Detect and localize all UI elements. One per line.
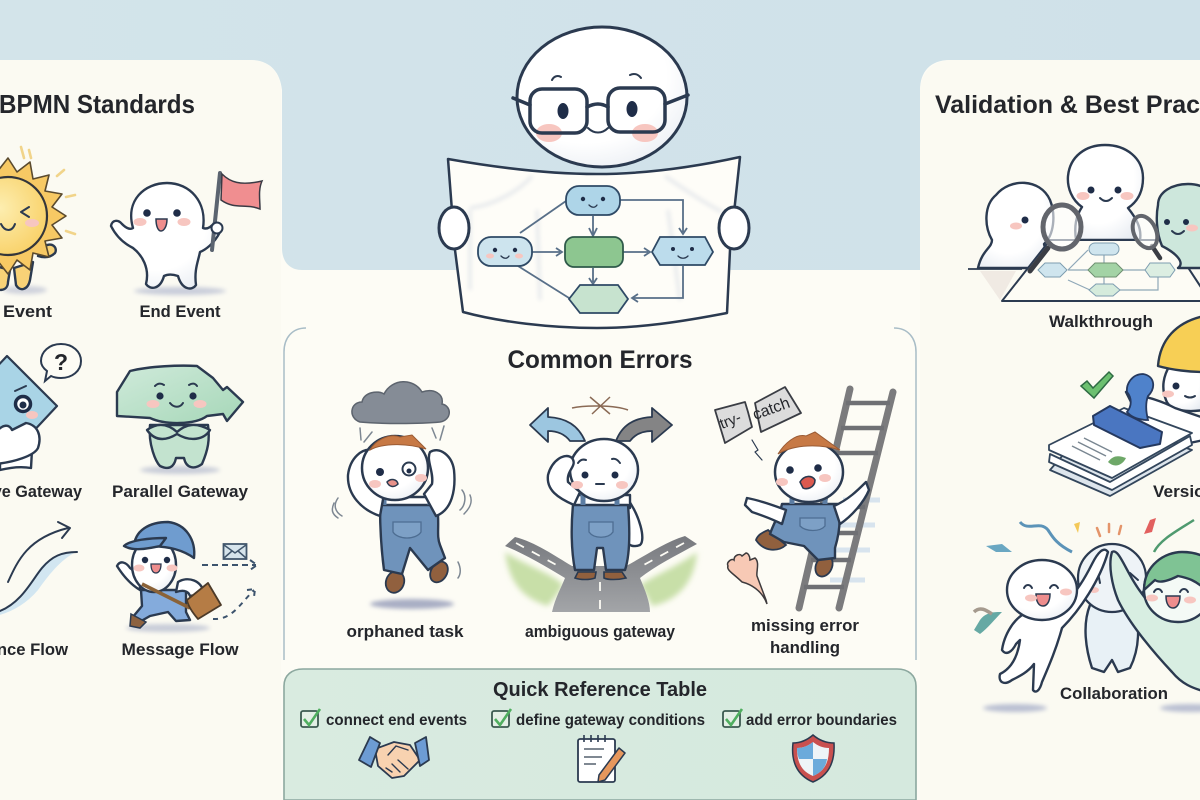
illustration: missing error handling [715, 387, 893, 608]
quick reference background [284, 669, 916, 800]
item: define gateway conditions: define gateway conditions [516, 712, 705, 729]
illustration: orphaned task [332, 382, 471, 609]
flow diagram on map [478, 186, 713, 313]
icon: start event sun [0, 147, 75, 294]
label: parallel gateway: Parallel Gateway [112, 482, 249, 501]
icon: exclusive gateway diamond: ? [54, 349, 68, 375]
label: walkthrough: Walkthrough [1049, 312, 1153, 331]
heading: BPMN standards: BPMN Standards [0, 89, 195, 119]
icon: notepad and pencil [578, 735, 625, 782]
icon: collaboration high five [974, 518, 1200, 712]
icon: sequence flow curves [0, 522, 77, 616]
panel: validation and best practices [920, 60, 1200, 800]
icon: version control stamp and papers [1049, 316, 1200, 496]
icon: shield [793, 735, 834, 782]
panel: quick reference table [284, 669, 916, 800]
heading: common errors: Common Errors [508, 346, 692, 374]
process map paper [448, 157, 740, 328]
icon: exclusive gateway diamond [0, 344, 81, 470]
panel background: BPMN standards [0, 60, 281, 800]
item: connect end events: connect end events [326, 712, 467, 729]
label: end event: End Event [140, 302, 221, 321]
panel: BPMN standards [0, 60, 281, 800]
icon: end event character with flag [111, 173, 262, 295]
illustration: ambiguous gateway [505, 397, 697, 612]
label: orphaned task: orphaned task [346, 622, 464, 641]
icon: message flow courier character [117, 522, 257, 632]
label: missing error handling: missing error [751, 616, 859, 635]
mascot holding process map [439, 27, 749, 328]
panel: common errors [284, 328, 916, 660]
mascot body showing through the map [470, 176, 722, 300]
mascot hands [439, 207, 749, 249]
icon: parallel gateway green arrow character [117, 366, 243, 474]
heading: quick reference table: Quick Reference Table [493, 679, 707, 701]
label: missing error handling: handling [770, 638, 840, 657]
item: add error boundaries: add error boundaries [746, 712, 897, 729]
icon: handshake [359, 737, 429, 778]
common errors frame [284, 328, 916, 660]
illustration: missing error handling: try- [717, 409, 744, 433]
label: ambiguous gateway: ambiguous gateway [525, 622, 675, 641]
icon: walkthrough team inspecting a map [968, 145, 1200, 301]
blue header band [0, 0, 1200, 270]
illustration: missing error handling: catch [751, 395, 792, 424]
panel background: validation [920, 60, 1200, 800]
mascot head with glasses [513, 27, 688, 167]
label: message flow: Message Flow [122, 640, 239, 659]
label: collaboration: Collaboration [1060, 684, 1168, 703]
item: connect end events [301, 709, 467, 729]
